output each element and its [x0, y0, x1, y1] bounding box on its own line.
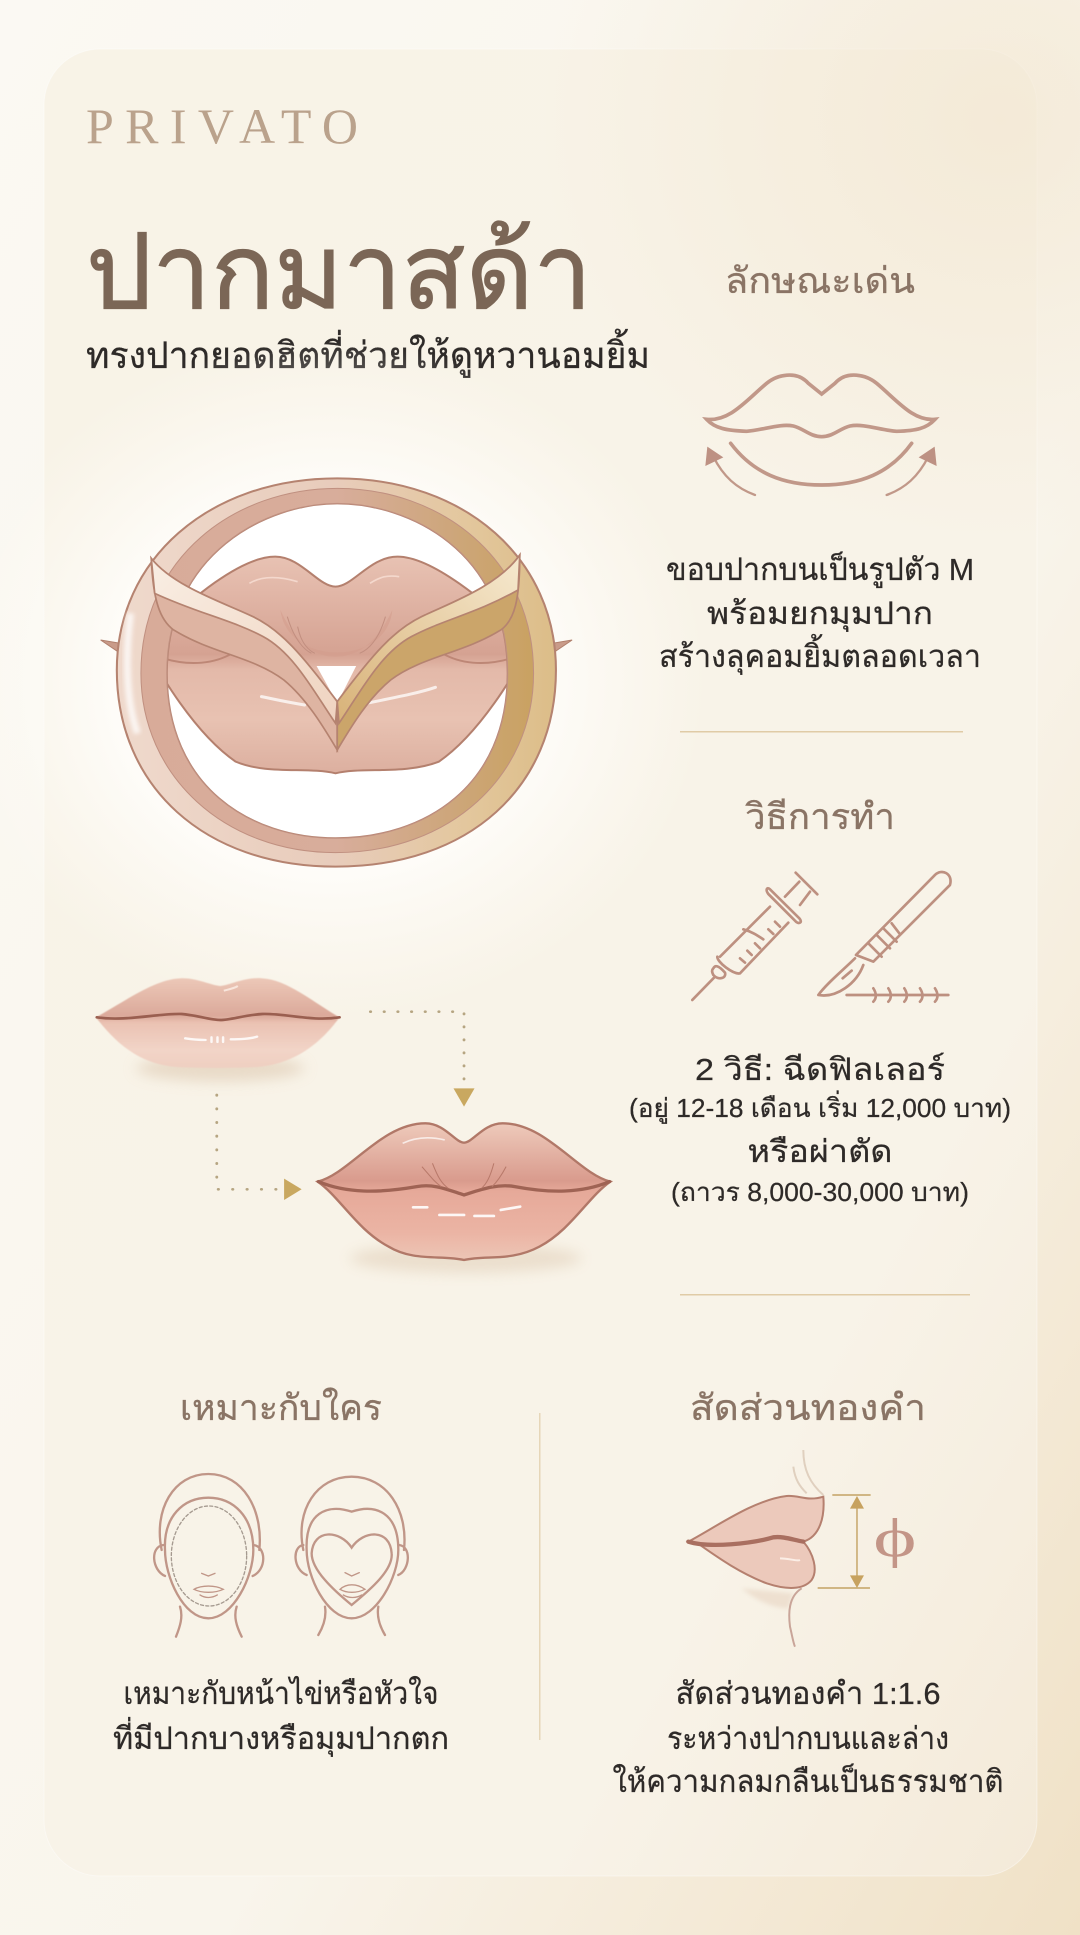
icon: scalpel	[818, 872, 951, 1002]
gloss	[261, 687, 435, 705]
icon: oval face	[154, 1474, 263, 1637]
lip corner spikes	[101, 640, 572, 653]
ring hole white	[167, 503, 508, 838]
icon: heart face	[296, 1477, 408, 1635]
ring highlight	[127, 613, 137, 733]
who text: เหมาะกับหน้าไข่หรือหัวใจ	[124, 1676, 438, 1711]
shadow	[136, 1055, 304, 1082]
left wing top	[151, 558, 337, 723]
golden ratio text: สัดส่วนทองคำ 1:1.6	[676, 1676, 940, 1711]
features text	[659, 551, 981, 676]
icon: lip profile with phi: ϕ	[873, 1508, 917, 1569]
who text: ที่มีปากบางหรือมุมปากตก	[113, 1717, 449, 1758]
method text: หรือผ่าตัด	[748, 1134, 892, 1169]
golden ratio text: ระหว่างปากบนและล่าง	[667, 1721, 949, 1756]
lips after	[318, 1123, 610, 1273]
heading: method: วิธีการทำ	[745, 796, 895, 837]
ring outer band	[117, 478, 556, 867]
icon: lip profile with phi	[688, 1450, 917, 1647]
method text	[629, 1052, 1011, 1207]
big lips	[143, 557, 532, 773]
heading: features: ลักษณะเด่น	[725, 260, 915, 301]
golden ratio text: ให้ความกลมกลืนเป็นธรรมชาติ	[612, 1763, 1004, 1799]
features text: ขอบปากบนเป็นรูปตัว M	[666, 551, 974, 588]
shadow	[350, 1243, 582, 1273]
lips before	[96, 978, 340, 1082]
icon: syringe	[692, 873, 817, 1000]
features text: สร้างลุคอมยิ้มตลอดเวลา	[659, 634, 981, 676]
left wing underside	[151, 558, 337, 750]
method text: (ถาวร 8,000-30,000 บาท)	[671, 1177, 969, 1207]
title: ปากมาสด้า	[86, 215, 592, 331]
method text: 2 วิธี: ฉีดฟิลเลอร์	[695, 1052, 945, 1087]
features text: พร้อมยกมุมปาก	[707, 596, 933, 633]
dotted arrow left	[217, 1095, 302, 1200]
white notch	[317, 666, 356, 703]
right wing underside	[337, 555, 520, 750]
heading: who: เหมาะกับใคร	[180, 1387, 382, 1428]
ring inner band	[141, 488, 534, 853]
hero glow	[0, 340, 710, 1020]
subtitle: ทรงปากยอดฮิตที่ช่วยให้ดูหวานอมยิ้ม	[86, 328, 650, 378]
golden ratio text	[612, 1676, 1004, 1799]
icon: lip outline with arrows	[705, 375, 937, 495]
brand logo: PRIVATO	[86, 98, 358, 154]
heading: golden ratio: สัดส่วนทองคำ	[690, 1387, 926, 1428]
method text: (อยู่ 12-18 เดือน เริ่ม 12,000 บาท)	[629, 1090, 1011, 1124]
hero illustration: lips in ring	[101, 478, 572, 867]
right wing top	[337, 555, 520, 723]
who text	[113, 1676, 449, 1758]
dotted arrow right	[370, 1012, 475, 1107]
